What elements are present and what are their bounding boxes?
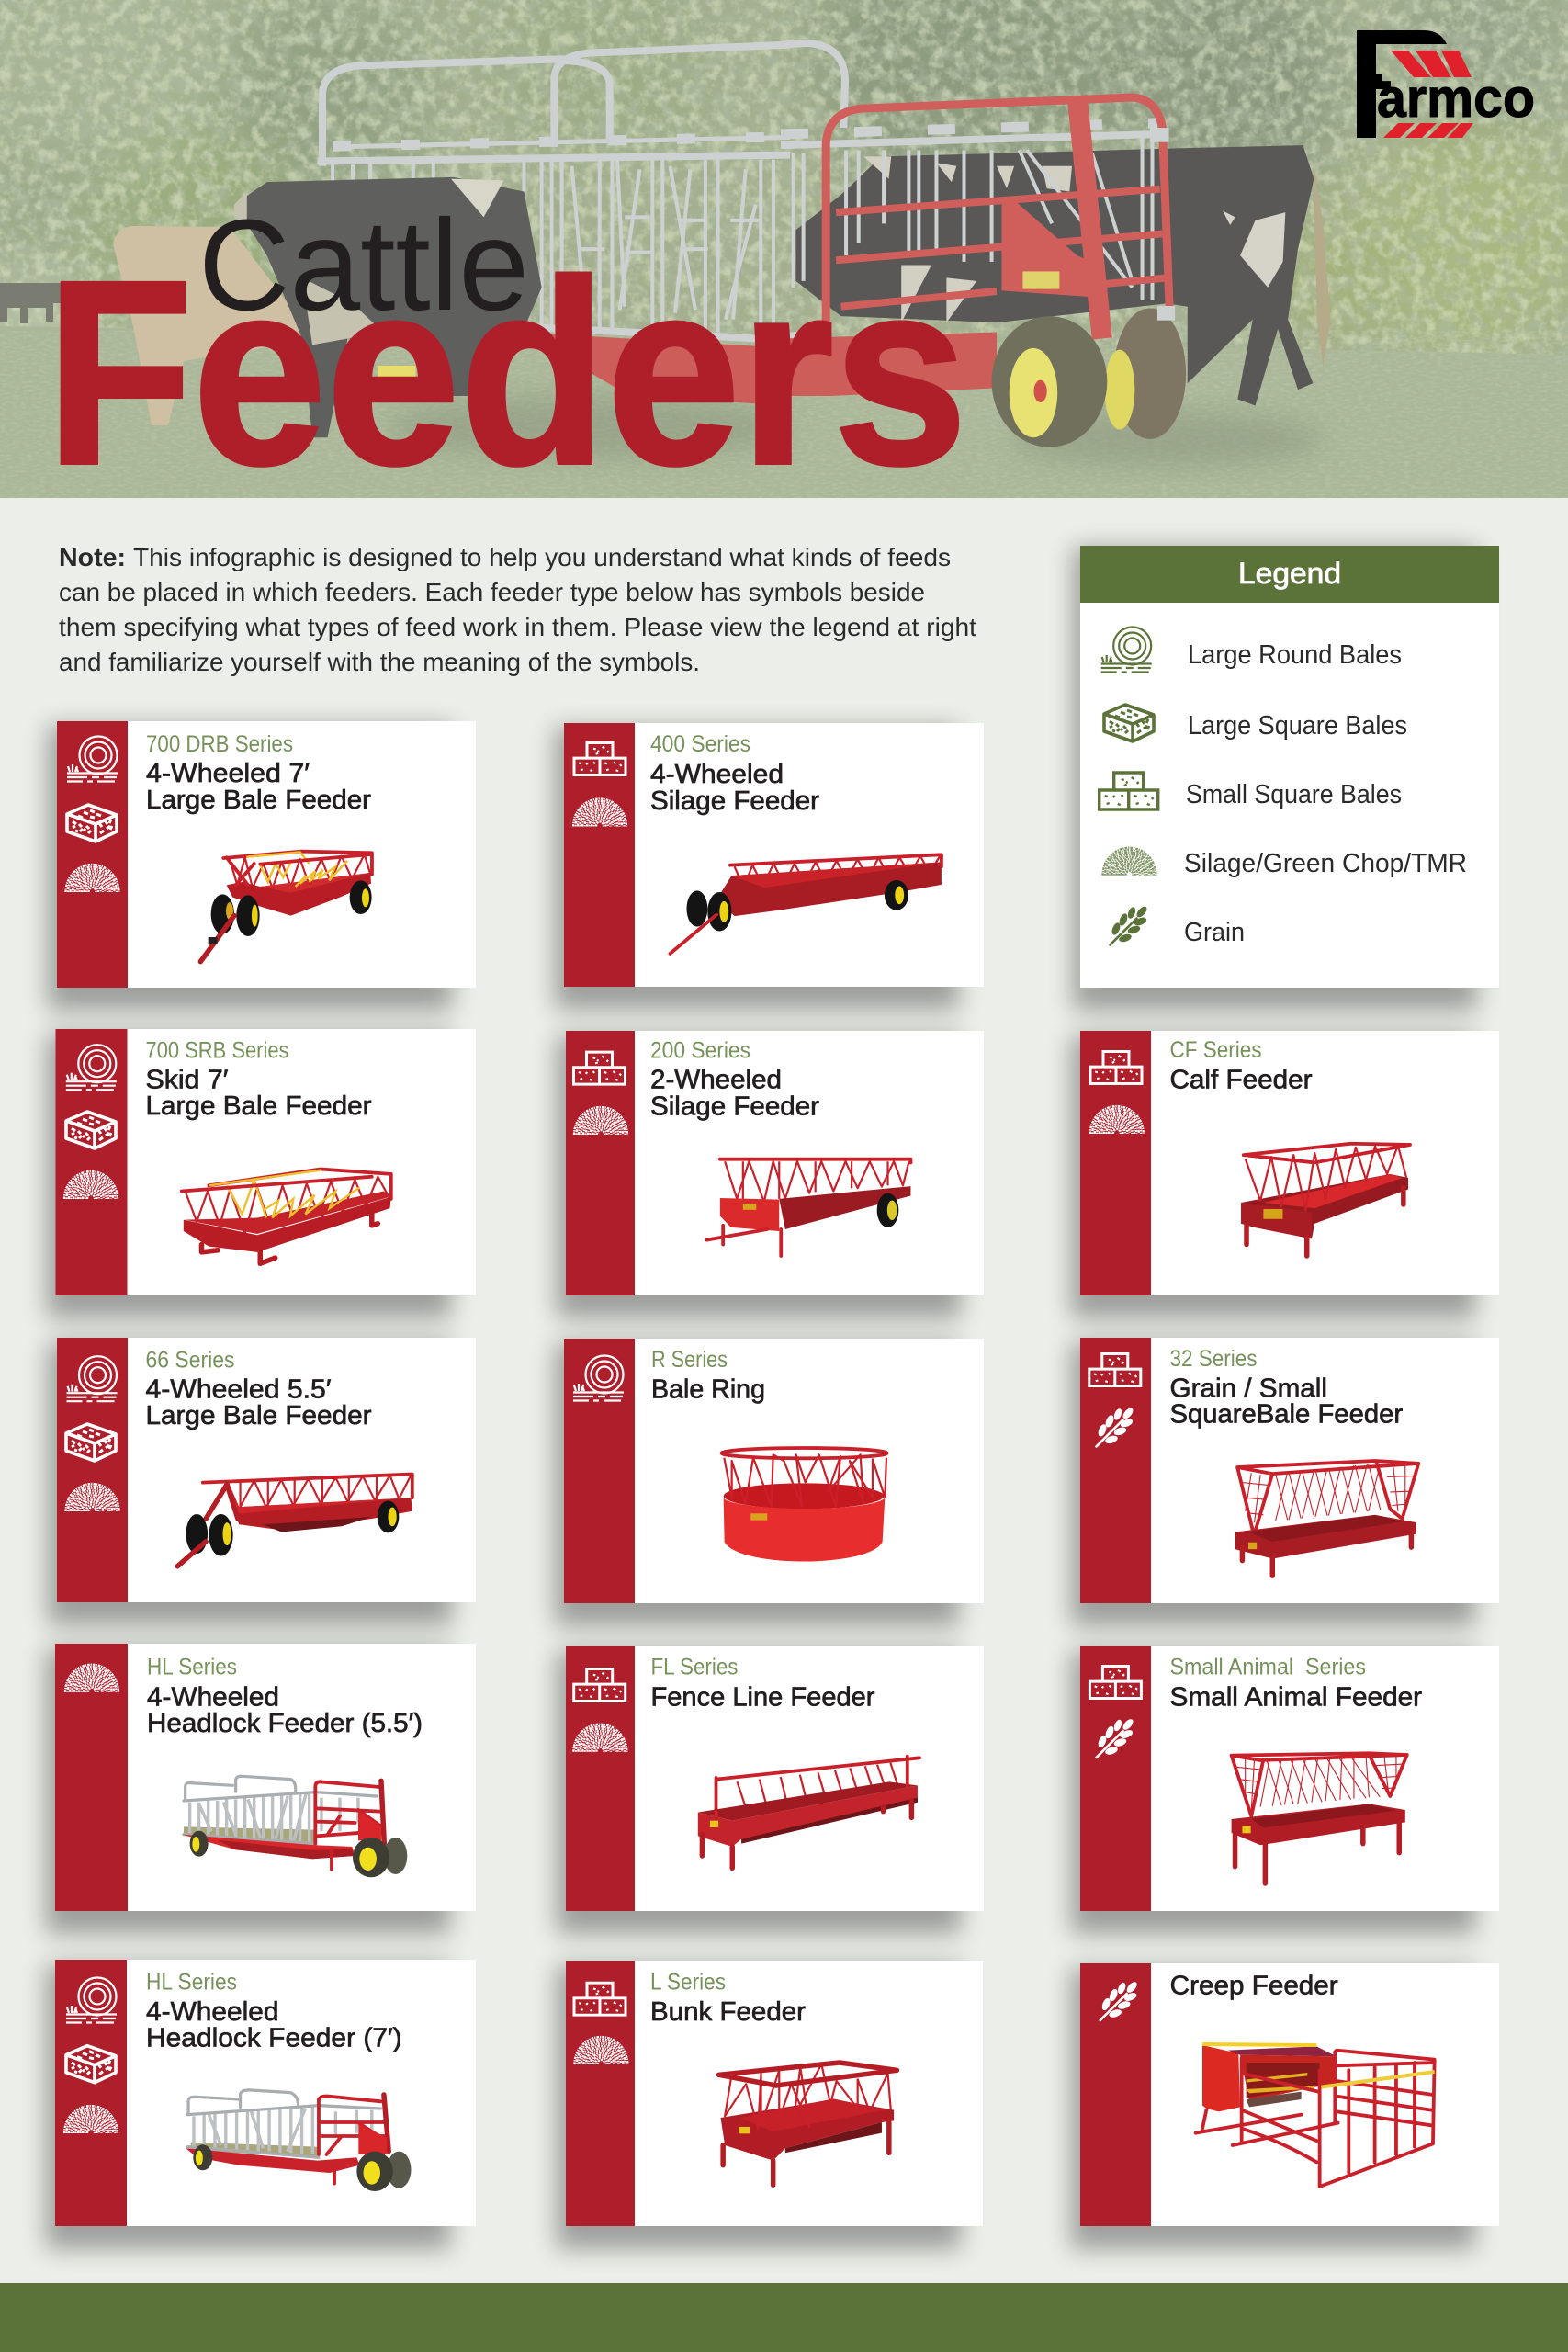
panel: 200 Series: [557, 1031, 984, 1318]
jersey cow: [113, 226, 300, 425]
series and name: Grain / Small: [1170, 1374, 1327, 1403]
series and name: 66 Series: [145, 1347, 235, 1373]
legend item: silage: Silage/Green Chop/TMR: [1184, 849, 1467, 878]
series and name: R Series: [651, 1347, 728, 1373]
feed symbols sidebar: [566, 1031, 635, 1295]
series and name: 4-Wheeled: [650, 760, 784, 789]
panel: 32 Series: [1071, 1338, 1499, 1626]
feed symbols sidebar: [566, 1646, 635, 1911]
note text block: and familiarize yourself with the meaning of the symbols.: [59, 648, 700, 676]
legend item: grain: [1110, 905, 1245, 947]
galvanised headlock frame: [318, 45, 790, 340]
title line: Feeders: Feeders: [46, 227, 967, 519]
legend item: large square bales: [1104, 705, 1407, 741]
feeder illustration: [1241, 1144, 1410, 1256]
feeder illustration: [200, 852, 372, 962]
series and name: [651, 1347, 765, 1405]
series and name: Large Bale Feeder: [145, 1091, 372, 1121]
title line: Cattle: Cattle: [198, 192, 529, 337]
feeder illustration: [177, 1474, 412, 1566]
rear cows behind the feeder: [795, 145, 1331, 405]
series and name: Calf Feeder: [1170, 1066, 1313, 1095]
series and name: 400 Series: [650, 731, 750, 757]
note text block: can be placed in which feeders. Each feeder type below has symbols beside: [59, 578, 925, 606]
series and name: [650, 1038, 819, 1121]
series and name: 700 DRB Series: [146, 731, 293, 757]
feeder illustration: [698, 1757, 919, 1868]
logo: Farmco: [1357, 30, 1534, 138]
panel: 700 SRB Series: [47, 1029, 476, 1318]
series and name: HL Series: [147, 1655, 237, 1680]
feed symbols sidebar: [55, 1644, 128, 1911]
feed symbols sidebar: [564, 723, 635, 987]
series and name: 700 SRB Series: [145, 1038, 288, 1064]
red feeder tub, frame and wheels: [781, 96, 1186, 447]
series and name: [650, 1970, 806, 2027]
series and name: 200 Series: [650, 1038, 750, 1064]
feeder illustration: [671, 854, 942, 954]
panel: HL Series 7: [46, 1960, 476, 2249]
series and name: Large Bale Feeder: [145, 1401, 372, 1430]
note text block: Note:: [59, 543, 126, 571]
feed symbols sidebar: [564, 1339, 635, 1603]
series and name: [650, 1655, 875, 1713]
feed symbols sidebar: [1080, 1031, 1151, 1295]
feeder illustration: [1235, 1461, 1418, 1576]
panel: Small Animal Series: [1071, 1646, 1499, 1934]
feeder illustration: [182, 1776, 407, 1877]
panel: CF Series: [1071, 1031, 1499, 1318]
feed symbols sidebar: [566, 1961, 635, 2226]
logo: Farmco: F: [1343, 0, 1458, 171]
series and name: SquareBale Feeder: [1170, 1400, 1403, 1430]
panel: L Series: [557, 1961, 983, 2249]
feed symbols sidebar: [55, 1960, 127, 2226]
series and name: FL Series: [650, 1655, 739, 1680]
note text block: them specifying what types of feed work in them. Please view the legend at right: [59, 613, 976, 641]
series and name: [1170, 1037, 1313, 1095]
feeder illustration: [722, 1448, 887, 1562]
series and name: 4-Wheeled: [146, 1997, 279, 2027]
series and name: 4-Wheeled 7′: [146, 759, 310, 788]
footer bar: [0, 2283, 1568, 2352]
feed symbols sidebar: [57, 1338, 128, 1602]
series and name: [145, 1347, 372, 1430]
legend item: small square bales: [1100, 773, 1402, 809]
feed symbols sidebar: [1080, 1646, 1151, 1911]
pasture grass: [0, 326, 1568, 498]
panel: legend: [1073, 546, 1499, 1011]
feed symbols sidebar: [1080, 1338, 1151, 1603]
series and name: [147, 1655, 423, 1738]
legend header: [1080, 546, 1499, 603]
series and name: [650, 731, 819, 816]
legend item: large round bales: Large Round Bales: [1188, 640, 1402, 670]
panel: Creep Feeder: [1071, 1963, 1499, 2249]
series and name: Small Animal Series: [1170, 1655, 1366, 1680]
series and name: [1170, 1655, 1422, 1713]
series and name: Headlock Feeder (5.5′): [147, 1709, 423, 1738]
series and name: Silage Feeder: [650, 1091, 819, 1121]
feeder illustration: [186, 2090, 411, 2191]
series and name: Large Bale Feeder: [146, 786, 371, 815]
panel: FL Series: [557, 1646, 984, 1934]
series and name: Bale Ring: [651, 1375, 765, 1405]
series and name: [145, 1038, 372, 1121]
foliage backdrop: [0, 0, 1568, 377]
feeder illustration: [706, 1159, 910, 1256]
series and name: 4-Wheeled: [147, 1683, 279, 1713]
series and name: [146, 731, 371, 815]
feeder illustration: [1232, 1753, 1407, 1883]
feed symbols sidebar: [55, 1029, 127, 1295]
logo: Farmco: armco: [1377, 68, 1535, 129]
series and name: 32 Series: [1170, 1346, 1257, 1372]
series and name: HL Series: [146, 1970, 237, 1996]
note text block: [59, 543, 976, 676]
series and name: Small Animal Feeder: [1170, 1683, 1422, 1713]
series and name: Silage Feeder: [650, 786, 819, 816]
legend header: Legend: [1238, 557, 1341, 590]
feeder illustration: [719, 2063, 897, 2185]
panel: 700 DRB Series: [48, 721, 476, 1011]
series and name: Skid 7′: [145, 1066, 228, 1095]
series and name: Bunk Feeder: [650, 1997, 806, 2027]
feed symbols sidebar: [1080, 1963, 1151, 2226]
panel: 66 Series: [48, 1338, 476, 1625]
legend item: grain: Grain: [1184, 918, 1245, 947]
note text block: This infographic is designed to help you understand what kinds of feeds: [133, 543, 951, 571]
series and name: Headlock Feeder (7′): [146, 2024, 402, 2053]
legend item: small square bales: Small Square Bales: [1186, 780, 1402, 809]
hero photo: cattle at a headlock feeder in a pasture: [0, 0, 1568, 498]
holstein cow, front: [234, 177, 542, 437]
legend item: large square bales: Large Square Bales: [1188, 711, 1407, 741]
title: [46, 192, 967, 519]
panel: 400 Series: [555, 723, 984, 1010]
panel: R Series: [555, 1339, 984, 1626]
series and name: 2-Wheeled: [650, 1066, 782, 1095]
series and name: [146, 1970, 402, 2053]
series and name: 4-Wheeled 5.5′: [145, 1375, 331, 1405]
series and name: [1170, 1346, 1403, 1430]
name: Creep Feeder: [1170, 1972, 1338, 2001]
feeder illustration: [1196, 2044, 1435, 2187]
panel: HL Series 5.5: [46, 1644, 476, 1934]
feeder illustration: [182, 1169, 391, 1263]
series and name: L Series: [650, 1970, 726, 1996]
series and name: CF Series: [1170, 1037, 1262, 1063]
series and name: Fence Line Feeder: [650, 1683, 875, 1713]
feed symbols sidebar: [57, 721, 128, 988]
distant herd: [0, 283, 64, 323]
legend item: large round bales: [1101, 627, 1402, 673]
